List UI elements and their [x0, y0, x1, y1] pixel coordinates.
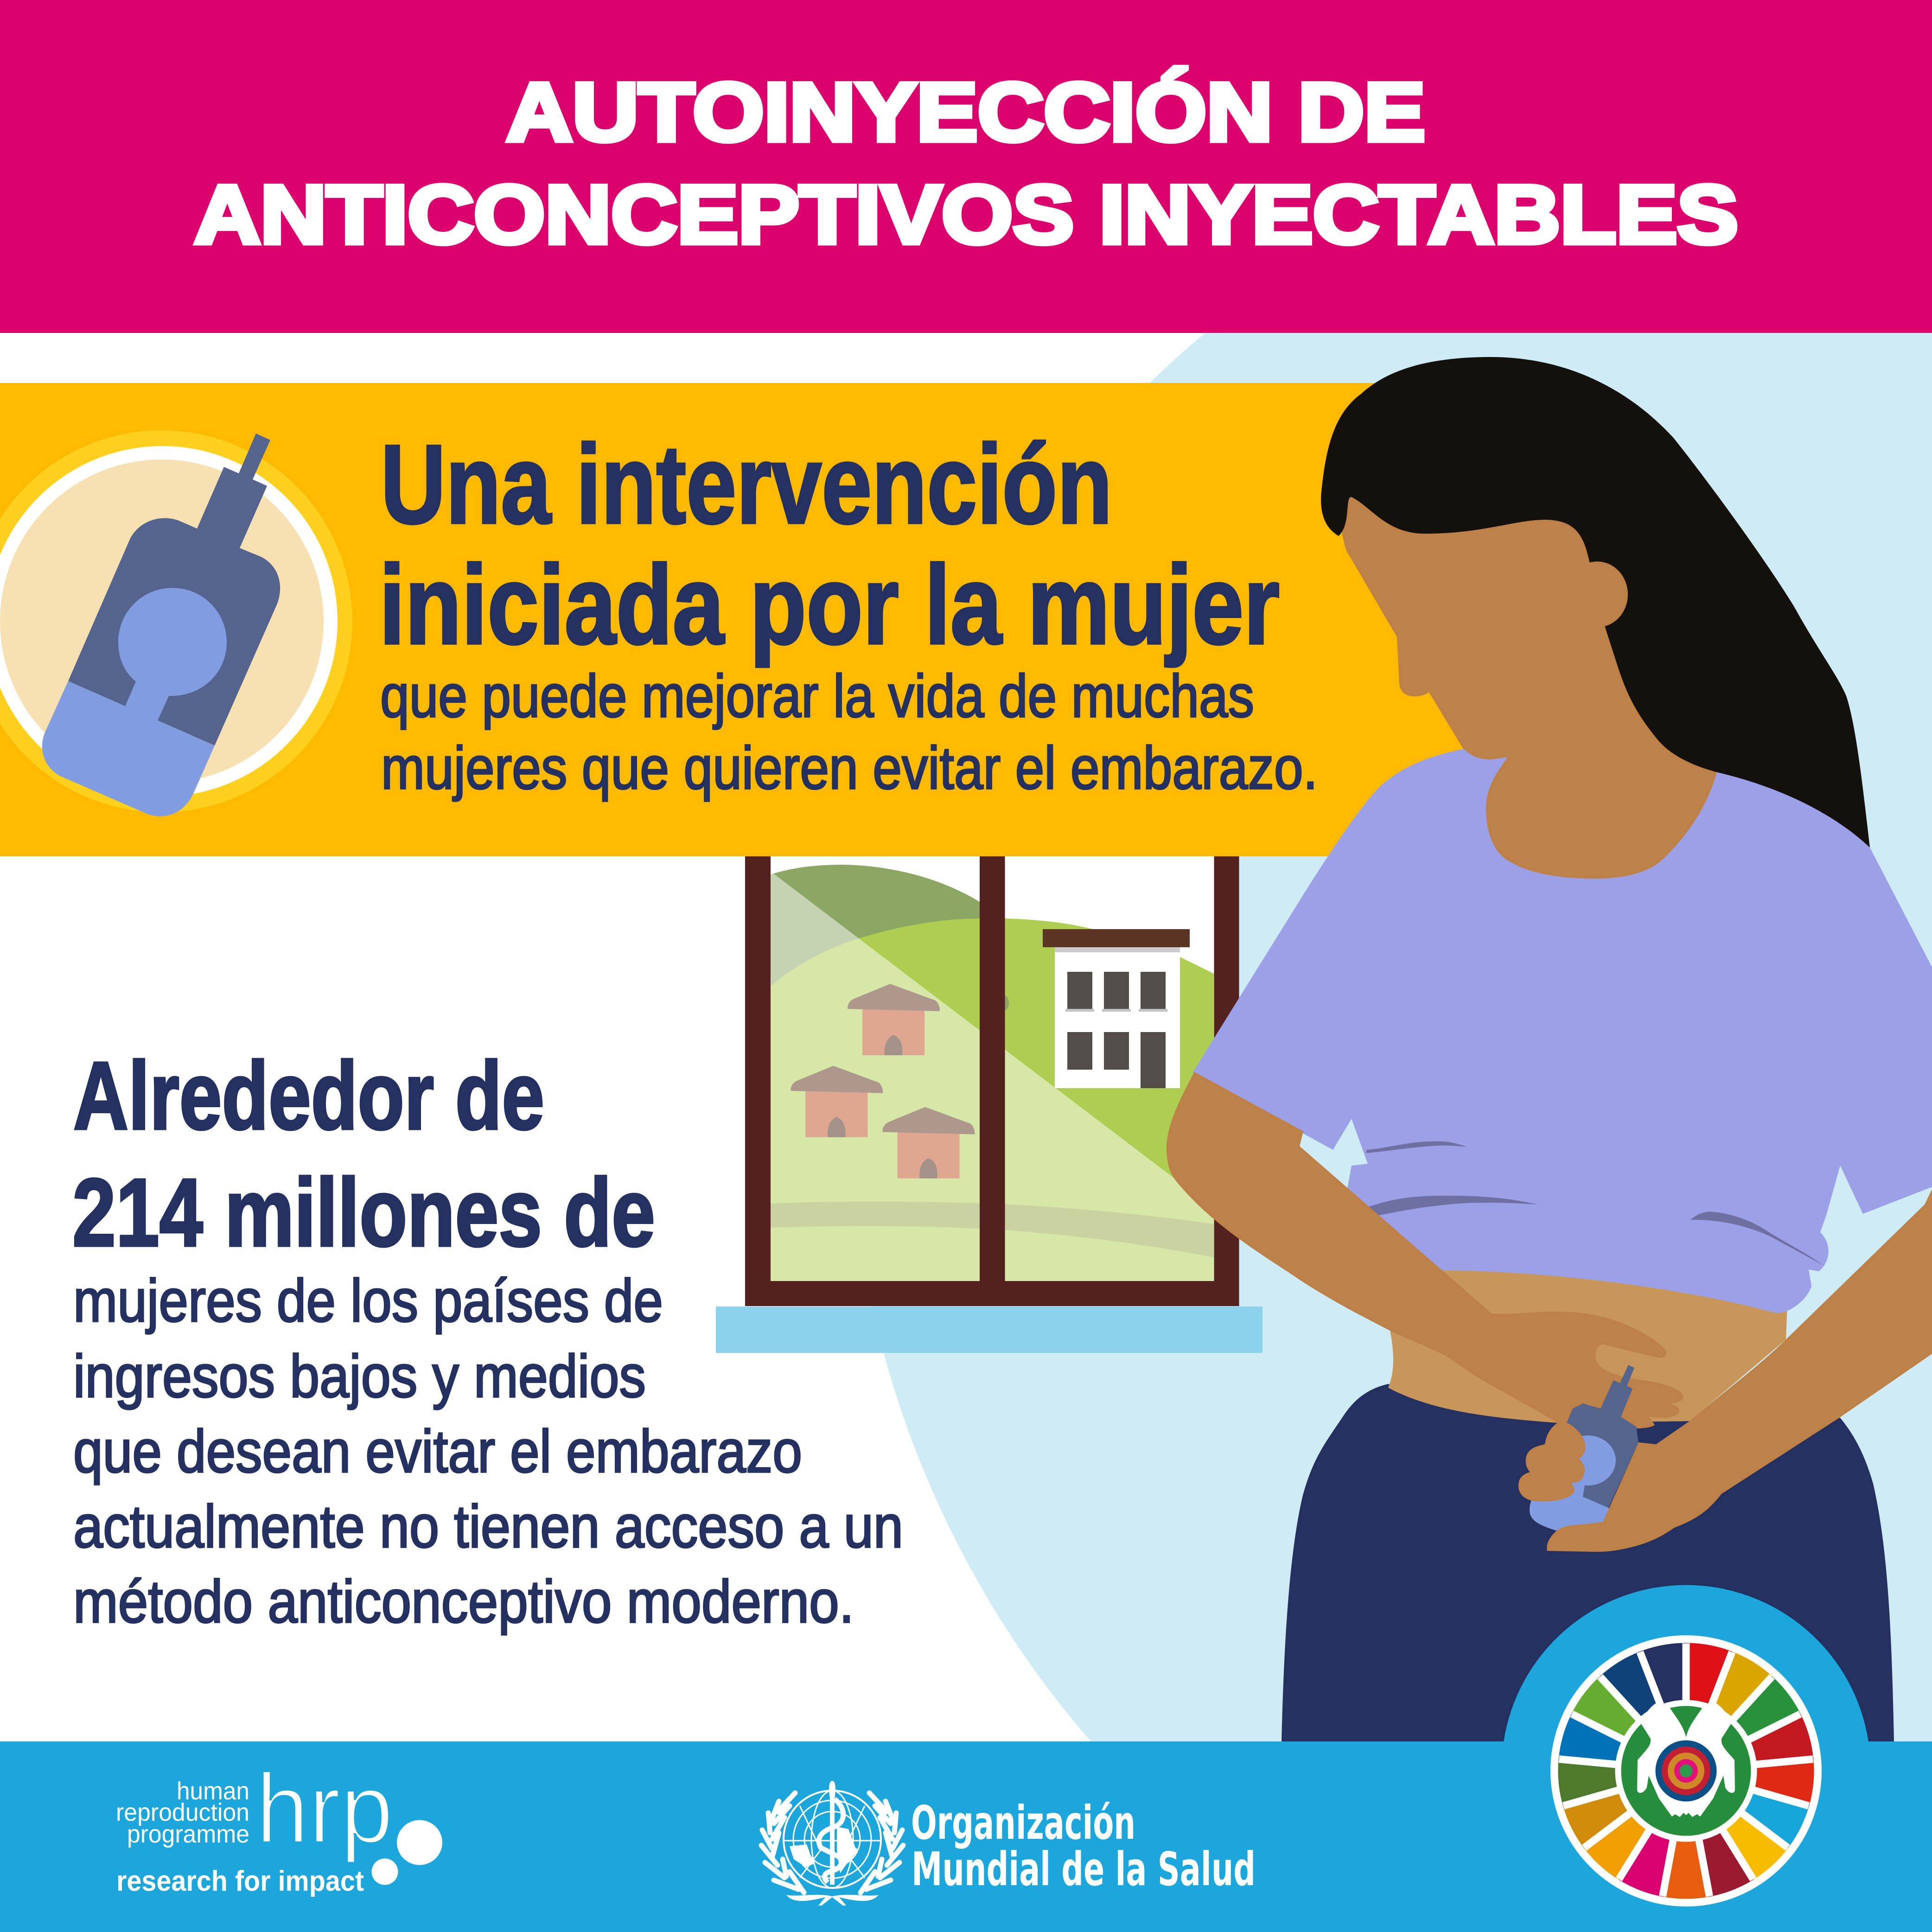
statistic text [72, 1042, 903, 1635]
logo: hrp [116, 1753, 442, 1897]
WHO name [911, 1796, 1256, 1896]
window frame [745, 856, 1239, 1306]
road [771, 1202, 1214, 1257]
logo: WHO emblem [761, 1781, 903, 1906]
globe [784, 1791, 881, 1888]
orange banner [0, 383, 1484, 856]
subheading line 2: mujeres que quieren evitar el embarazo. [381, 734, 1318, 802]
WHO name: Mundial de la Salud [912, 1842, 1256, 1896]
target rings [1655, 1741, 1716, 1802]
fingers [1518, 1423, 1585, 1501]
semicircle behind SDG wheel [1504, 1585, 1868, 1742]
hrp dots [372, 1820, 442, 1885]
left arm and hand [1167, 1072, 1683, 1428]
green disc [1621, 1706, 1751, 1836]
hair [1321, 357, 1870, 848]
staff and snake [819, 1781, 843, 1885]
hrp name [116, 1777, 249, 1848]
glass reflection [771, 874, 1214, 1281]
statistic body [73, 1267, 903, 1635]
light blue background shape [849, 333, 1932, 1742]
shirt wrinkles [1365, 1141, 1823, 1265]
continents [790, 1827, 859, 1873]
right arm and hand [1547, 1189, 1932, 1552]
WHO name: Organización [911, 1796, 1135, 1850]
wheel segments [1546, 1631, 1826, 1911]
statistic heading 2: 214 millones de [72, 1159, 655, 1267]
dark hill [771, 865, 1066, 1020]
laurel left [761, 1793, 804, 1893]
heading line 1: Una intervención [381, 422, 1112, 547]
hrp name: human [177, 1777, 249, 1805]
footer band [0, 1741, 1932, 1932]
distant house [1001, 995, 1009, 1010]
hands [1637, 1702, 1735, 1817]
statistic body: ingresos bajos y medios [73, 1342, 646, 1410]
hrp wordmark: hrp [256, 1753, 393, 1864]
window sill [716, 1307, 1262, 1353]
injector in hand [1525, 1365, 1639, 1531]
statistic body: mujeres de los países de [73, 1267, 663, 1334]
trousers [1282, 1384, 1894, 1742]
building [1043, 929, 1190, 1088]
heading line 2: iniciada por la mujer [379, 542, 1280, 668]
ribbon [786, 1895, 879, 1906]
window with landscape [716, 856, 1262, 1353]
house 1 [848, 984, 940, 1055]
green hill [771, 918, 1214, 1281]
statistic body: actualmente no tienen acceso a un [73, 1492, 903, 1560]
title line 1: AUTOINYECCIÓN DE [506, 66, 1425, 158]
SDG wheel [1546, 1631, 1826, 1911]
hrp tagline: research for impact [116, 1865, 364, 1897]
head and neck [1342, 491, 1717, 879]
icon: injector in circle [0, 430, 352, 816]
hrp name: programme [127, 1820, 249, 1848]
statistic heading 1: Alrededor de [73, 1042, 544, 1150]
statistic body: que desean evitar el embarazo [73, 1417, 802, 1485]
shirt [1192, 742, 1932, 1313]
hrp name: reproduction [116, 1798, 249, 1826]
heading: intervention [379, 422, 1318, 802]
title line 2: ANTICONCEPTIVOS INYECTABLES [194, 168, 1738, 261]
ear [1567, 561, 1628, 627]
woman illustration [1167, 357, 1932, 1742]
laurel right [861, 1793, 903, 1893]
house 3 [883, 1107, 975, 1179]
subheading line 1: que puede mejorar la vida de muchas [380, 662, 1254, 730]
title banner [0, 0, 1932, 333]
statistic body: método anticonceptivo moderno. [73, 1568, 854, 1635]
house 2 [791, 1066, 883, 1137]
belly [1388, 1252, 1788, 1423]
